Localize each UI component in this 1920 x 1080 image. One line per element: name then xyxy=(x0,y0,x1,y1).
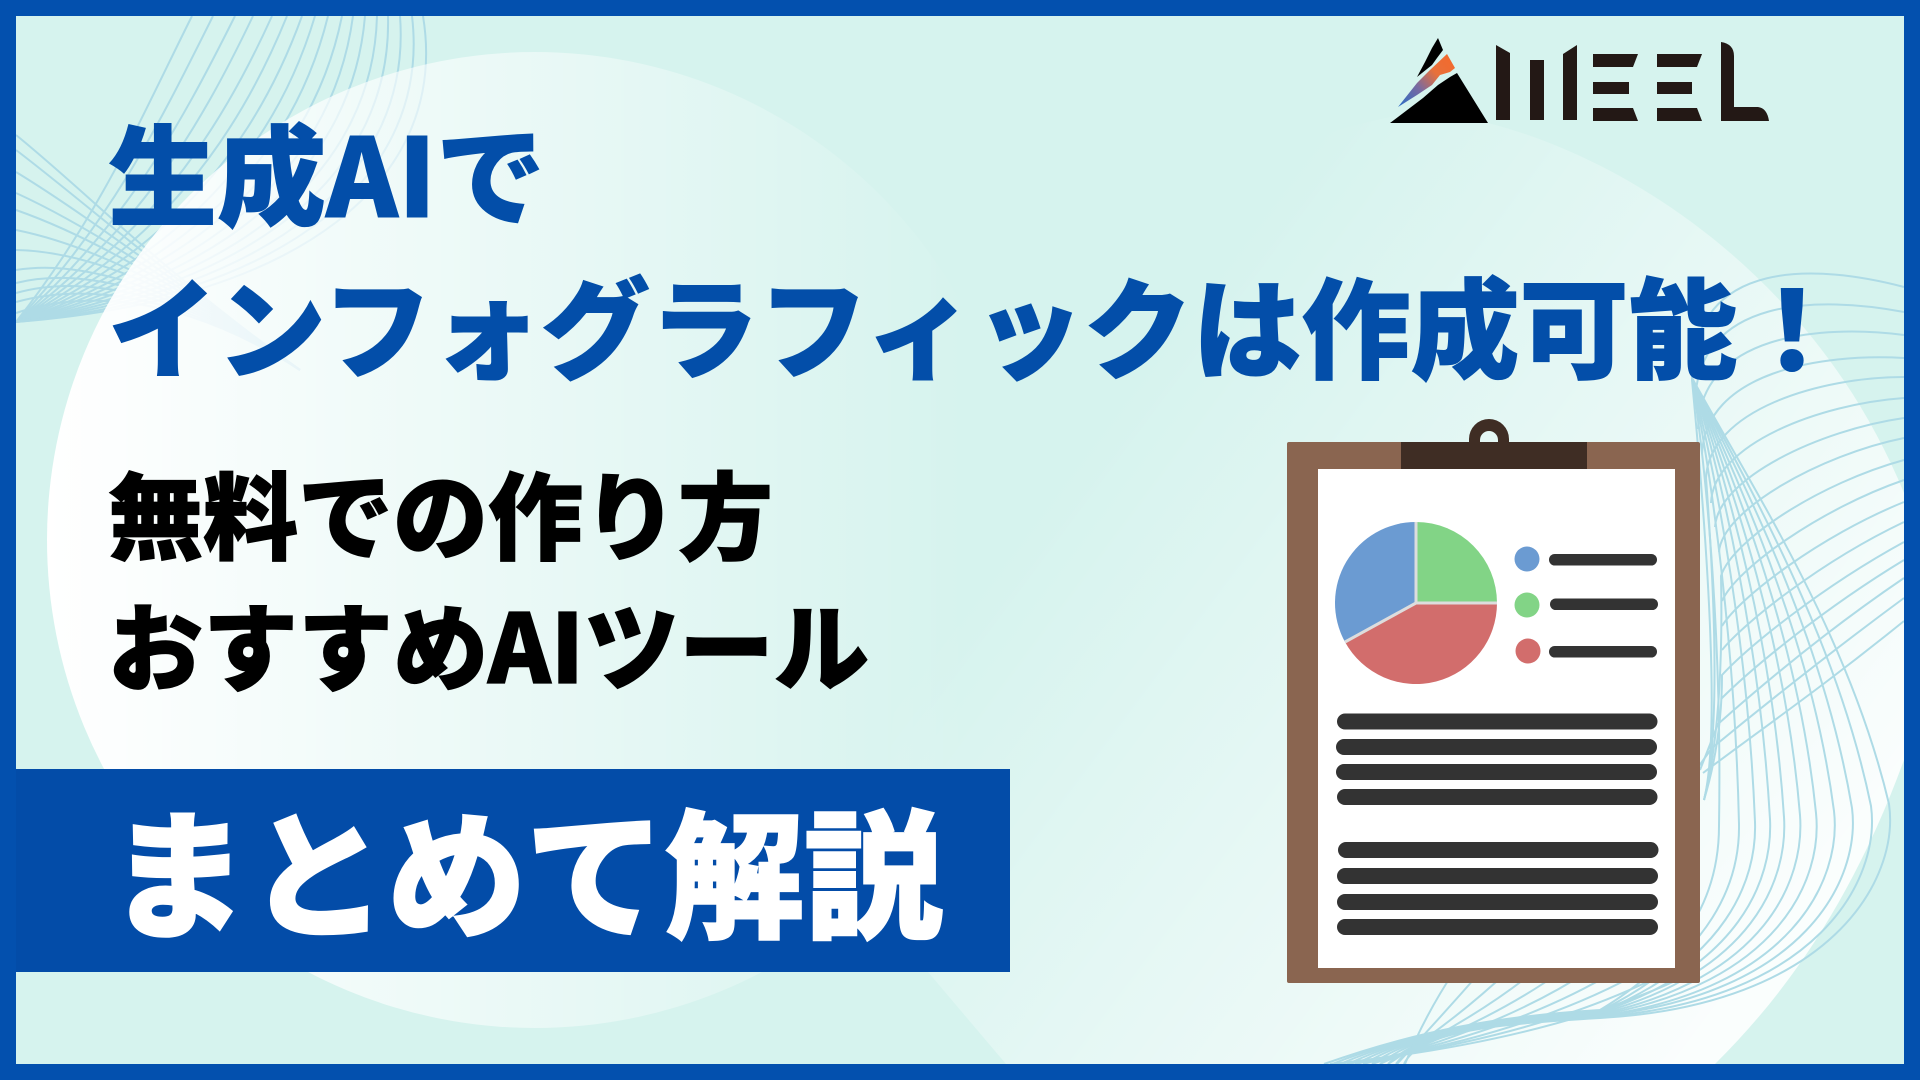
clip ring xyxy=(1469,419,1509,442)
title line 2: インフォグラフィックは作成可能！ xyxy=(108,245,1847,402)
pie chart xyxy=(1335,522,1497,684)
banner text: まとめて解説 xyxy=(109,767,943,968)
banner: まとめて解説 xyxy=(16,769,1010,972)
subtitle line 2: おすすめAIツール xyxy=(108,574,869,711)
text lines block 2 xyxy=(1337,842,1658,935)
legend: blue xyxy=(1514,546,1657,572)
legend: green xyxy=(1514,592,1658,618)
subtitle line 1: 無料での作り方 xyxy=(108,443,773,580)
text lines block 1 xyxy=(1336,714,1658,805)
clipboard board xyxy=(1287,442,1700,983)
paper xyxy=(1318,469,1675,968)
title line 1: 生成AIで xyxy=(108,92,545,249)
clip bar xyxy=(1401,442,1587,469)
legend: red xyxy=(1516,638,1657,664)
